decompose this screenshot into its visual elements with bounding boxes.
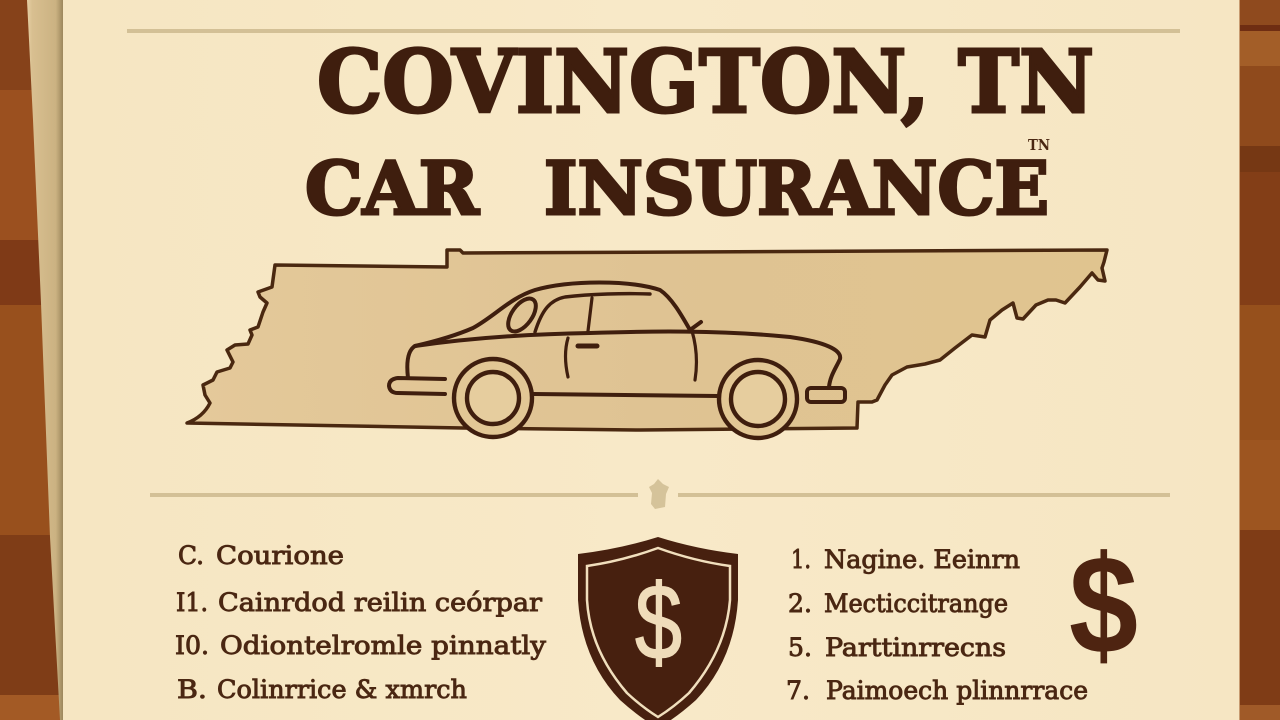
rear bumper bbox=[389, 378, 445, 394]
left item 3: Odiontelromle pinnatly bbox=[220, 631, 547, 660]
left item 1 bbox=[178, 541, 344, 570]
car illustration bbox=[389, 282, 845, 438]
back paper sheet bbox=[27, 0, 63, 720]
shield dollar sign: $ bbox=[635, 562, 682, 682]
Tennessee state map bbox=[187, 250, 1107, 430]
right item 2: Mecticcitrange bbox=[824, 589, 1008, 618]
left item 4: B. bbox=[177, 675, 207, 704]
rear window bbox=[503, 294, 541, 336]
trademark mark: TN bbox=[1028, 136, 1050, 154]
left item 2: Cainrdod reilin ceórpar bbox=[218, 588, 542, 617]
left item 1: C. bbox=[178, 541, 204, 570]
right item 2: 2. bbox=[788, 589, 812, 618]
window pillar bbox=[588, 298, 592, 331]
shield icon bbox=[578, 537, 738, 720]
right item 4: Paimoech plinnrrace bbox=[826, 676, 1088, 705]
door handle bbox=[578, 344, 597, 348]
title: CAR bbox=[305, 146, 480, 232]
front wheel bbox=[719, 360, 797, 438]
car roof and hood bbox=[407, 282, 701, 378]
car belt line and front bbox=[415, 332, 840, 387]
right item 1: Nagine. Eeinrn bbox=[824, 545, 1020, 574]
right item 3: 5. bbox=[788, 633, 812, 662]
front bumper bbox=[807, 388, 845, 402]
left item 1: Courione bbox=[216, 541, 344, 570]
door lines bbox=[566, 331, 696, 380]
sill line bbox=[534, 394, 718, 396]
rear wheel bbox=[454, 359, 532, 437]
divider ornament bbox=[649, 479, 669, 509]
right item 3: Parttinrrecns bbox=[825, 633, 1006, 662]
left item 2: I1. bbox=[176, 588, 208, 617]
left list bbox=[175, 541, 547, 704]
large dollar icon: $ bbox=[1069, 526, 1138, 683]
title: COVINGTON, TN bbox=[317, 32, 1094, 133]
lower divider bbox=[150, 479, 1170, 509]
left item 3: I0. bbox=[175, 631, 209, 660]
title bbox=[305, 32, 1094, 232]
top rule bbox=[127, 29, 1180, 33]
left item 4: Colinrrice & xmrch bbox=[217, 675, 467, 704]
right item 1: 1. bbox=[791, 545, 811, 574]
right item 4: 7. bbox=[786, 676, 810, 705]
title: INSURANCE bbox=[544, 146, 1049, 232]
side window bbox=[535, 294, 650, 332]
right list bbox=[786, 545, 1088, 705]
